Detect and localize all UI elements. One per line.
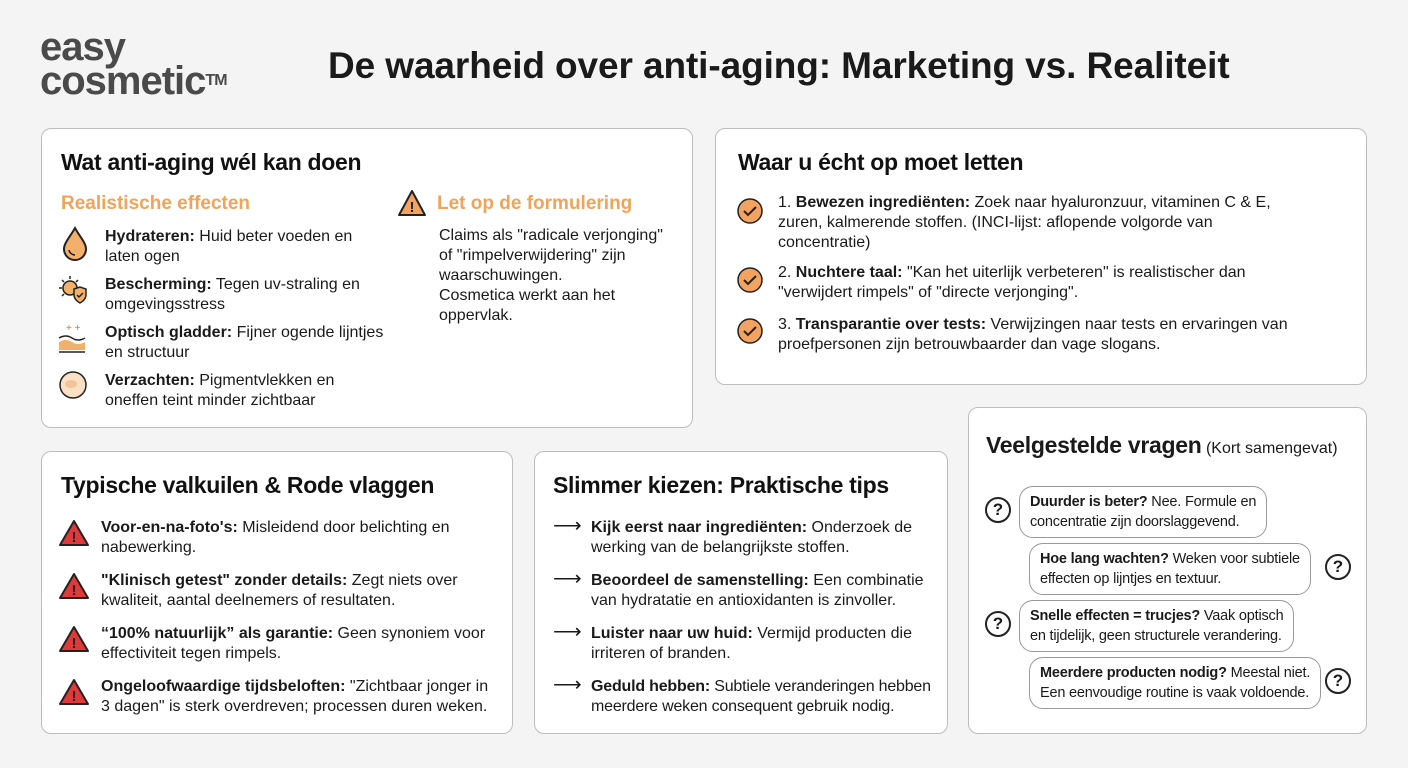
item 1: 1. Bewezen ingrediënten: Zoek naar hyaluronzuur, vitaminen C & E,: [778, 194, 1271, 211]
icon: red warning: !: [72, 635, 76, 652]
item: bescherming: Bescherming: Tegen uv-straling en: [105, 276, 360, 293]
heading: Veelgestelde vragen (Kort samengevat): [986, 432, 1338, 458]
icon: check: [737, 267, 763, 293]
red flag 1: [59, 519, 450, 556]
item 1: [737, 194, 1271, 251]
heading: Wat anti-aging wél kan doen: [61, 149, 361, 175]
faq 3: en tijdelijk, geen structurele verandering.: [1030, 628, 1282, 644]
item: optisch gladder: en structuur: [105, 344, 189, 361]
item: hydrateren: Hydrateren: Huid beter voeden en: [105, 228, 352, 245]
faq 2: Hoe lang wachten? Weken voor subtiele: [1040, 551, 1300, 567]
red flag 2: kwaliteit, aantal deelnemers of resultaten.: [101, 592, 395, 609]
faq 2: [1029, 543, 1351, 595]
tip 1: [553, 515, 912, 556]
red flag 1: nabewerking.: [101, 539, 196, 556]
heading: Typische valkuilen & Rode vlaggen: [61, 472, 434, 498]
tip 1: Kijk eerst naar ingrediënten: Onderzoek de: [591, 519, 912, 536]
item: verzachten: [105, 372, 334, 409]
icon: skin circle: [59, 371, 87, 399]
panel: waar u echt op moet letten: [715, 128, 1367, 385]
text: oppervlak.: [439, 307, 513, 324]
subheading: realistische effecten: Realistische effecten: [61, 193, 250, 214]
red flag 4: [59, 678, 488, 715]
warning: let op de formulering: [398, 190, 663, 324]
item: verzachten: oneffen teint minder zichtbaar: [105, 392, 316, 409]
icon: sun shield: [59, 276, 87, 304]
icon: smooth layers: + +: [66, 323, 81, 334]
tip 4: ⟶: [553, 674, 581, 696]
tip 2: ⟶: [553, 568, 582, 590]
item 2: "verwijdert rimpels" of "directe verjonging".: [778, 284, 1078, 301]
heading: Waar u écht op moet letten: [738, 149, 1023, 175]
item: hydrateren: laten ogen: [105, 248, 180, 265]
red flag 3: [59, 625, 485, 662]
item 1: zuren, kalmerende stoffen. (INCI-lijst: aflopende volgorde van: [778, 214, 1213, 231]
item 2: 2. Nuchtere taal: "Kan het uiterlijk verbeteren" is realistischer dan: [778, 264, 1246, 281]
faq 3: ?: [993, 614, 1003, 633]
text: of "rimpelverwijdering" zijn: [439, 247, 626, 264]
tip 3: irriteren of branden.: [591, 645, 731, 662]
tip 3: ⟶: [553, 621, 582, 643]
tip 3: Luister naar uw huid: Vermijd producten die: [591, 625, 912, 642]
tip 2: [553, 568, 924, 609]
tip 2: Beoordeel de samenstelling: Een combinatie: [591, 572, 924, 589]
panel: slimmer kiezen: [534, 451, 948, 734]
tip 3: [553, 621, 912, 662]
faq 1: [985, 486, 1267, 538]
text: waarschuwingen.: [439, 267, 563, 284]
tip 1: ⟶: [553, 515, 582, 537]
item: bescherming: omgevingsstress: [105, 296, 225, 313]
faq 3: [985, 600, 1294, 652]
red flag 3: “100% natuurlijk” als garantie: Geen synoniem voor: [101, 625, 485, 642]
icon: check: [737, 198, 763, 224]
logo: [40, 25, 227, 103]
red flag 4: Ongeloofwaardige tijdsbeloften: "Zichtbaar jonger in: [101, 678, 488, 695]
red flag 4: 3 dagen" is sterk overdreven; processen duren weken.: [101, 698, 487, 715]
icon: red warning: [59, 573, 89, 599]
red flag 2: [59, 572, 458, 609]
tip 1: werking van de belangrijkste stoffen.: [591, 539, 850, 556]
text: Claims als "radicale verjonging": [439, 227, 663, 244]
item: bescherming: [105, 276, 360, 313]
icon: warning triangle: [398, 190, 426, 216]
icon: red warning: [59, 520, 89, 546]
text: [439, 227, 663, 324]
logo: cosmeticTM: [40, 59, 227, 103]
faq 4: [1029, 657, 1351, 709]
faq 4: ?: [1333, 671, 1343, 690]
item: verzachten: Verzachten: Pigmentvlekken en: [105, 372, 334, 389]
heading: Slimmer kiezen: Praktische tips: [553, 472, 889, 498]
icon: red warning: !: [72, 688, 76, 705]
item 3: 3. Transparantie over tests: Verwijzingen naar tests en ervaringen van: [778, 316, 1288, 333]
icon: smooth layers: [58, 323, 86, 353]
title: De waarheid over anti-aging: Marketing vs. Realiteit: [328, 45, 1230, 86]
text: Cosmetica werkt aan het: [439, 287, 615, 304]
icon: check: [737, 318, 763, 344]
item: optisch gladder: Optisch gladder: Fijner ogende lijntjes: [105, 324, 383, 341]
faq 1: ?: [993, 500, 1003, 519]
faq 4: Meerdere producten nodig? Meestal niet.: [1040, 665, 1310, 681]
panel: typische valkuilen: [41, 451, 513, 734]
icon: red warning: !: [72, 529, 76, 546]
tip 4: meerdere weken consequent gebruik nodig.: [591, 698, 894, 715]
tip 4: [553, 674, 931, 715]
panel: wat anti-aging wel kan doen: [41, 128, 693, 428]
icon: red warning: [59, 679, 89, 705]
tip 4: Geduld hebben: Subtiele veranderingen hebben: [591, 678, 931, 695]
item 3: proefpersonen zijn betrouwbaarder dan vage slogans.: [778, 336, 1160, 353]
faq 2: effecten op lijntjes en textuur.: [1040, 571, 1221, 587]
icon: red warning: !: [72, 582, 76, 599]
tip 2: van hydratatie en antioxidanten is zinvoller.: [591, 592, 896, 609]
icon: warning triangle: !: [410, 199, 414, 216]
red flag 1: Voor-en-na-foto's: Misleidend door belichting en: [101, 519, 450, 536]
logo: easy: [40, 25, 125, 69]
faq 4: Een eenvoudige routine is vaak voldoende.: [1040, 685, 1309, 701]
item 2: [737, 264, 1246, 301]
icon: red warning: [59, 626, 89, 652]
red flag 3: effectiviteit tegen rimpels.: [101, 645, 281, 662]
item 1: concentratie): [778, 234, 870, 251]
faq 3: Snelle effecten = trucjes? Vaak optisch: [1030, 608, 1283, 624]
item: optisch gladder: [105, 324, 383, 361]
subheading: Let op de formulering: [437, 193, 632, 214]
icon: water drop: [63, 226, 87, 261]
panel: veelgestelde vragen: [968, 407, 1367, 734]
red flag 2: "Klinisch getest" zonder details: Zegt niets over: [101, 572, 458, 589]
faq 1: concentratie zijn doorslaggevend.: [1030, 514, 1239, 530]
faq 1: Duurder is beter? Nee. Formule en: [1030, 494, 1256, 510]
faq 2: ?: [1333, 557, 1343, 576]
item: hydrateren: [105, 228, 352, 265]
item 3: [737, 316, 1288, 353]
